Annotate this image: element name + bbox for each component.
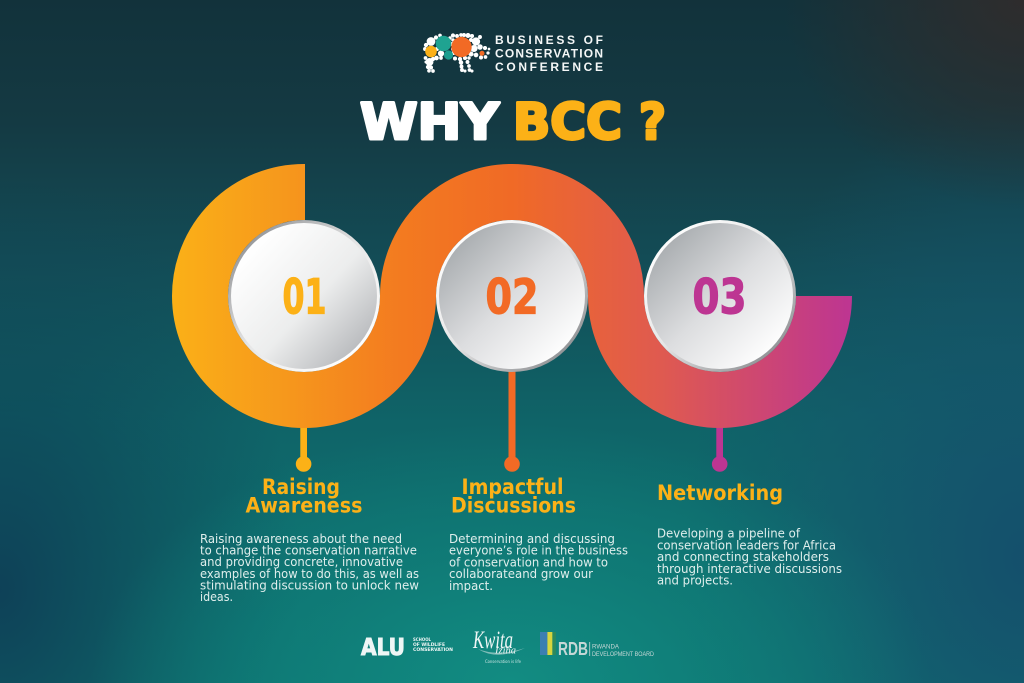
heading: Impactful Discussions: Impactful xyxy=(462,475,564,499)
column: Impactful Discussions xyxy=(449,475,628,593)
logo: ALU School of Wildlife Conservation: SCHOOL xyxy=(413,637,431,643)
disc 01 xyxy=(228,220,380,372)
stem 3 xyxy=(712,425,728,472)
logo wordmark: CONSERVATION xyxy=(495,46,603,60)
column: Networking xyxy=(657,481,842,588)
logo: RDB Rwanda Development Board: RWANDA xyxy=(592,644,619,650)
logo: RDB Rwanda Development Board: DEVELOPMENT BOARD xyxy=(592,651,654,658)
disc 03 xyxy=(644,220,796,372)
logo: Kwita Izina: Conservation is life xyxy=(485,659,521,665)
heading: Networking: Networking xyxy=(657,481,783,505)
partner logos xyxy=(361,627,654,665)
text: Networking description xyxy=(657,527,842,588)
logo: Kwita Izina xyxy=(472,627,525,665)
text: Impactful Discussions description: Determining and discussing xyxy=(449,532,615,546)
text: Networking description: and connecting stakeholders xyxy=(657,550,829,564)
number 02: 02 xyxy=(486,270,538,326)
heading: Impactful Discussions xyxy=(451,475,576,518)
text: Raising Awareness description: and providing concrete, innovative xyxy=(200,555,403,569)
number 01: 01 xyxy=(282,270,326,326)
text: Networking description: and projects. xyxy=(657,574,733,588)
heading: Raising Awareness xyxy=(246,475,362,518)
small orange circle xyxy=(480,51,484,56)
heading: Impactful Discussions: Discussions xyxy=(451,494,576,518)
small teal circle xyxy=(444,50,453,60)
flag xyxy=(540,632,556,655)
logo: RDB Rwanda Development Board xyxy=(540,632,654,659)
large teal circle xyxy=(436,36,451,51)
logo: RDB Rwanda Development Board: RDB xyxy=(558,639,588,659)
text: Impactful Discussions description xyxy=(449,532,628,593)
logo: ALU School of Wildlife Conservation: ALU xyxy=(361,635,405,661)
logo: ALU School of Wildlife Conservation xyxy=(361,635,453,661)
text: Networking description: Developing a pipeline of xyxy=(657,527,801,541)
text: Raising Awareness description: ideas. xyxy=(200,590,233,604)
large orange circle xyxy=(451,37,472,57)
text: Raising Awareness description xyxy=(200,532,419,604)
text: Impactful Discussions description: of conservation and how to xyxy=(449,555,608,569)
text: Raising Awareness description: to change the conservation narrative xyxy=(200,544,417,558)
text: Impactful Discussions description: impact. xyxy=(449,579,493,593)
logo: Business of Conservation Conference xyxy=(423,33,603,74)
logo wordmark: BUSINESS OF xyxy=(495,33,603,47)
title: BCC xyxy=(513,93,622,151)
stem 2 xyxy=(504,370,520,472)
title xyxy=(360,93,666,151)
text: Raising Awareness description: stimulating discussion to unlock new xyxy=(200,578,419,592)
title: ? xyxy=(639,93,666,151)
text: Networking description: through interactive discussions xyxy=(657,562,842,576)
text: Raising Awareness description: Raising awareness about the need xyxy=(200,532,402,546)
number 03: 03 xyxy=(692,270,746,326)
logo: ALU School of Wildlife Conservation: CONSERVATION xyxy=(413,647,453,653)
heading: Raising Awareness: Raising xyxy=(262,475,340,499)
icon: rhino made of circles xyxy=(423,33,490,72)
logo wordmark xyxy=(495,33,603,74)
serpentine ribbon xyxy=(200,192,824,400)
column: Raising Awareness xyxy=(200,475,419,604)
logo: ALU School of Wildlife Conservation: OF WILDLIFE xyxy=(413,642,445,648)
logo: Kwita Izina: Izina xyxy=(494,644,516,656)
title: WHY xyxy=(360,93,500,151)
text: Raising Awareness description: examples of how to do this, as well as xyxy=(200,567,419,581)
text: Impactful Discussions description: collaborateand grow our xyxy=(449,567,593,581)
yellow circle xyxy=(425,46,437,57)
connector stems and dots xyxy=(296,370,728,472)
disc 02 xyxy=(436,220,588,372)
stem 1 xyxy=(296,425,311,472)
text: Networking description: conservation leaders for Africa xyxy=(657,538,836,552)
logo: Kwita Izina: Kwita xyxy=(472,627,513,654)
logo wordmark: CONFERENCE xyxy=(495,60,603,74)
text: Impactful Discussions description: everyone’s role in the business xyxy=(449,544,628,558)
heading: Raising Awareness: Awareness xyxy=(246,494,362,518)
